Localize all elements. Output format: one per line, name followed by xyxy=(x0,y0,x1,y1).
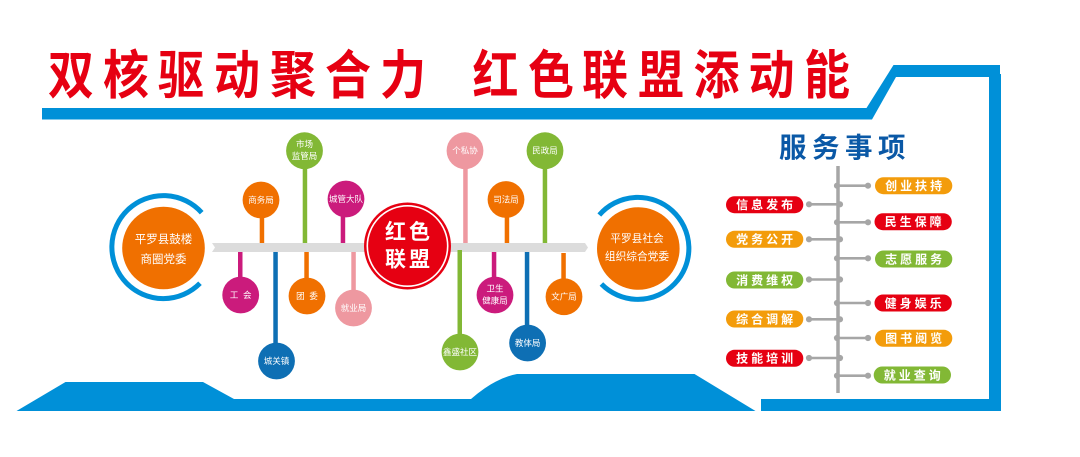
lollipop: 城关镇: 城关镇 xyxy=(264,356,290,366)
heading: 服务事项: 服务事项 xyxy=(779,132,911,163)
lollipop: 就业局: 就业局 xyxy=(341,303,366,313)
lollipop: 市场监管局: 市场 xyxy=(296,139,313,149)
title: 力 xyxy=(380,47,426,105)
node: right party committee xyxy=(597,197,689,299)
title: 合 xyxy=(325,47,371,105)
node: right party committee: 平罗县社会 xyxy=(610,232,664,245)
title: 聚 xyxy=(270,47,316,105)
center badge: 红色联盟: 联盟 xyxy=(385,248,433,272)
service tree connectors xyxy=(806,166,871,393)
lollipop: 商务局 xyxy=(243,182,279,243)
title: 动 xyxy=(748,47,795,105)
lollipop: 司法局 xyxy=(488,181,524,243)
pill: 图书阅览 xyxy=(875,330,952,347)
pill: 民生保障 xyxy=(874,213,952,230)
title xyxy=(48,47,850,105)
pill: 就业查询: 就业查询 xyxy=(884,367,944,382)
lollipop: 工会 xyxy=(222,252,259,313)
node: left party committee: 商圈党委 xyxy=(140,252,187,266)
pill: 综合调解: 综合调解 xyxy=(736,311,796,326)
lollipop: 民政局 xyxy=(527,132,563,243)
center badge: 红色联盟: 红色 xyxy=(385,221,433,244)
lollipop: 市场监管局: 监管局 xyxy=(292,151,317,161)
pill: 志愿服务 xyxy=(875,250,952,268)
bottom blue hills xyxy=(16,374,756,411)
pill: 消费维权 xyxy=(726,272,803,288)
lollipop: 卫生健康局: 卫生 xyxy=(486,284,504,294)
lollipop: 城管大队 xyxy=(328,181,364,243)
lollipop: 卫生健康局: 健康局 xyxy=(482,296,508,306)
lollipop: 工会: 工 会 xyxy=(230,290,252,300)
pill: 就业查询 xyxy=(874,366,951,384)
pill: 党务公开 xyxy=(726,231,803,248)
lollipop: 个私协 xyxy=(447,132,483,243)
node: left party committee xyxy=(112,196,205,299)
pill: 健身娱乐: 健身娱乐 xyxy=(885,295,945,310)
title: 添 xyxy=(693,47,740,105)
title: 能 xyxy=(804,47,850,105)
pill: 消费维权: 消费维权 xyxy=(736,272,796,287)
lollipop: 市场监管局 xyxy=(286,132,323,243)
lollipop: 个私协: 个私协 xyxy=(452,146,478,156)
node: right party committee: 组织综合党委 xyxy=(605,250,669,263)
lollipop: 鑫盛社区: 鑫盛社区 xyxy=(443,347,477,357)
title: 核 xyxy=(103,47,149,105)
central spine arrow xyxy=(212,243,588,252)
pill: 民生保障: 民生保障 xyxy=(885,214,945,229)
title: 动 xyxy=(214,47,260,105)
title: 盟 xyxy=(638,47,684,105)
lollipop: 卫生健康局 xyxy=(477,252,513,313)
lollipop: 民政局: 民政局 xyxy=(532,146,558,156)
lollipop: 文广局 xyxy=(546,253,582,315)
blue frame band xyxy=(42,65,1001,411)
pill: 信息发布: 信息发布 xyxy=(736,197,796,212)
lollipop: 城管大队: 城管大队 xyxy=(329,194,363,204)
lollipop: 司法局: 司法局 xyxy=(493,194,519,204)
node: left party committee: 平罗县鼓楼 xyxy=(135,232,193,246)
pill: 技能培训 xyxy=(726,350,803,367)
pill: 信息发布 xyxy=(726,196,803,213)
lollipop: 城关镇 xyxy=(258,252,295,379)
lollipop: 教体局: 教体局 xyxy=(515,338,540,348)
pill: 党务公开: 党务公开 xyxy=(736,232,796,247)
pill: 综合调解 xyxy=(726,310,803,328)
lollipop: 鑫盛社区 xyxy=(442,250,478,370)
pill: 志愿服务: 志愿服务 xyxy=(885,251,945,266)
lollipop: 文广局: 文广局 xyxy=(551,292,577,302)
pill: 图书阅览: 图书阅览 xyxy=(885,331,945,346)
lollipop: 教体局 xyxy=(509,252,546,361)
title: 驱 xyxy=(158,47,204,105)
center badge: 红色联盟 xyxy=(364,202,451,290)
lollipop: 商务局: 商务局 xyxy=(248,195,274,205)
lollipop: 团委: 团 委 xyxy=(296,291,318,301)
lollipop: 就业局 xyxy=(335,252,372,326)
lollipop: 团委 xyxy=(289,252,325,314)
pill: 技能培训: 技能培训 xyxy=(736,351,796,366)
pill: 创业扶持 xyxy=(875,177,952,194)
title: 红 xyxy=(472,47,519,105)
pill: 创业扶持: 创业扶持 xyxy=(885,178,945,193)
title: 联 xyxy=(582,47,628,105)
pill: 健身娱乐 xyxy=(874,294,952,312)
title: 双 xyxy=(48,47,94,105)
title: 色 xyxy=(528,47,574,105)
